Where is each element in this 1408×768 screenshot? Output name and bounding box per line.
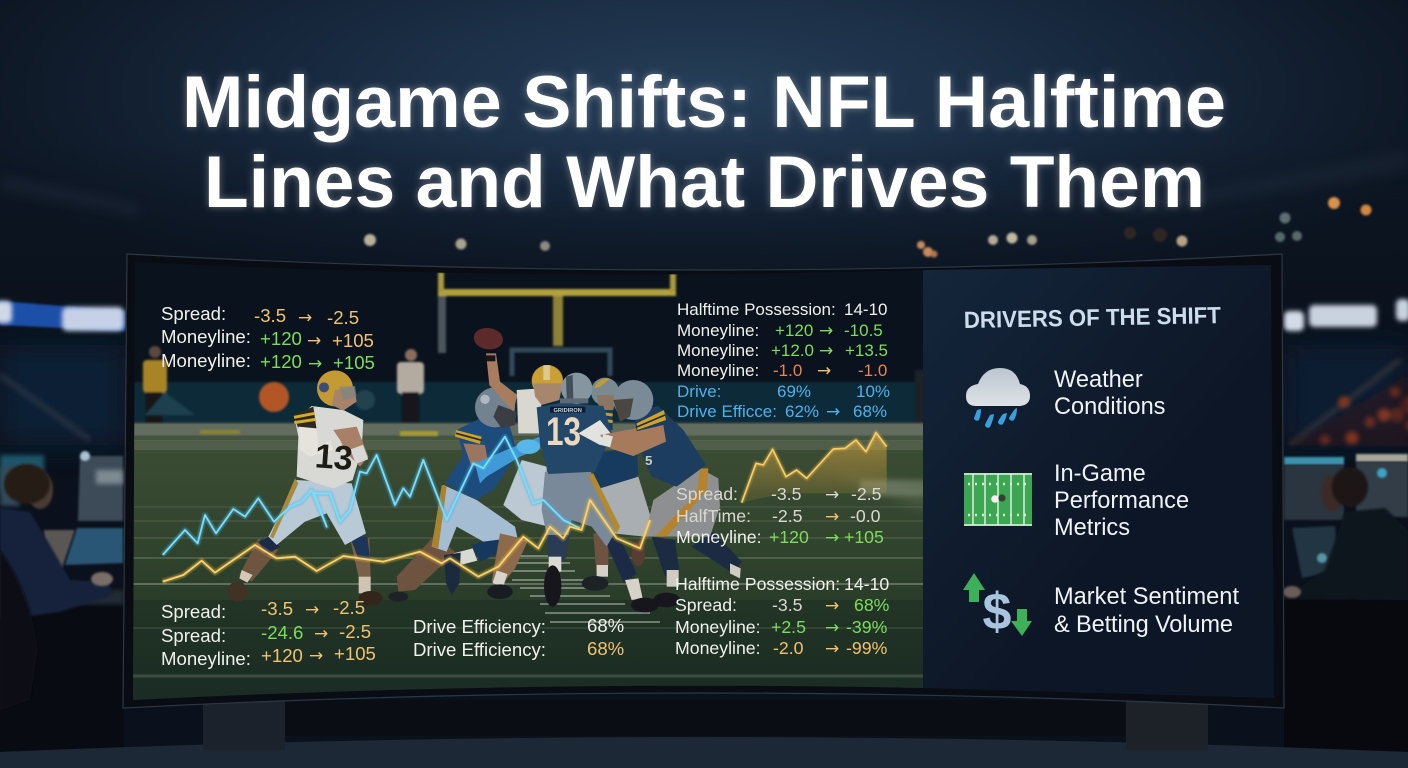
odds block: top right: Moneyline:	[677, 361, 759, 380]
odds block: bottom left: -2.5	[339, 621, 371, 642]
odds block: bottom left: Moneyline:	[161, 648, 251, 669]
odds block: top left: →	[307, 331, 321, 351]
odds block: bottom right: 68%	[854, 595, 890, 615]
odds block: top left: →	[308, 354, 322, 374]
odds block: bottom right: -39%	[846, 617, 888, 637]
label: market sentiment and betting volume: Market Sentiment	[1054, 584, 1239, 610]
odds block: middle right: -0.0	[850, 506, 881, 526]
drive efficiency block: Drive Efficiency:	[413, 639, 546, 660]
icon: rain cloud	[966, 368, 1030, 428]
odds block: middle right: +105	[844, 527, 884, 547]
odds block: top right: -1.0	[773, 361, 802, 380]
label: weather conditions: Conditions	[1054, 394, 1165, 420]
odds block: bottom right: +2.5	[771, 617, 806, 637]
label: weather conditions	[1054, 367, 1165, 420]
odds block: bottom right: -99%	[846, 638, 888, 658]
monitor stands	[203, 700, 1208, 750]
odds block: top right: 68%	[853, 402, 887, 421]
odds block: top left: Moneyline:	[161, 350, 251, 371]
odds block: middle right: →	[825, 507, 839, 527]
odds block: top right: 62%	[785, 402, 819, 421]
stadium light strips	[0, 299, 1408, 331]
odds block: top left	[161, 303, 375, 374]
stadium wall band	[133, 382, 925, 424]
odds block: top right: →	[819, 321, 833, 341]
odds block: bottom left: →	[309, 646, 323, 666]
odds block: bottom left: +120	[261, 645, 303, 666]
players: right lineman: 5	[645, 453, 653, 468]
odds block: top right: Drive:	[677, 382, 721, 401]
label: market sentiment and betting volume	[1054, 584, 1239, 638]
odds block: top left: -3.5	[254, 305, 286, 326]
odds block: top right: -1.0	[858, 361, 887, 380]
drive efficiency block	[413, 615, 624, 660]
line chart: blue trend	[163, 437, 580, 555]
stadium background people	[143, 346, 925, 430]
odds block: middle right	[676, 484, 884, 548]
odds block: bottom left: -2.5	[333, 597, 365, 618]
odds block: middle right: -3.5	[771, 484, 802, 504]
crowd lights right	[1290, 375, 1408, 447]
players: quarterback 13 (left)	[227, 370, 383, 606]
odds block: bottom right: -2.0	[773, 638, 804, 658]
players: center number 13 rusher	[537, 373, 666, 612]
odds block: middle right: HalfTime:	[676, 506, 751, 526]
monitor bezel	[123, 254, 1284, 708]
odds block: top right: Halftime Possession:	[677, 300, 836, 319]
odds block: top right: +12.0	[771, 341, 814, 360]
bokeh stadium lights	[364, 197, 1372, 258]
odds block: middle right: +120	[769, 527, 809, 547]
odds block: top left: +120	[260, 328, 302, 349]
label: in-game performance metrics	[1054, 461, 1189, 541]
odds block: top left: Spread:	[161, 303, 226, 324]
odds block: bottom right: -3.5	[772, 595, 803, 615]
panel: drivers of the shift	[923, 265, 1274, 698]
title: Lines and What Drives Them	[204, 142, 1205, 223]
icon: dollar with up and down arrows: $	[983, 583, 1012, 641]
field	[133, 424, 925, 704]
odds block: bottom left	[161, 597, 376, 669]
odds block: middle right: →	[825, 528, 839, 548]
odds block: bottom left: +105	[334, 643, 376, 664]
screen: football photo	[133, 260, 930, 705]
odds block: top right: -10.5	[844, 321, 883, 340]
odds block: bottom right: 14-10	[844, 574, 889, 594]
odds block: bottom right: Spread:	[675, 595, 737, 615]
odds block: bottom right: Moneyline:	[675, 638, 761, 658]
odds block: top left: -2.5	[327, 307, 359, 328]
odds block: top left: Moneyline:	[161, 326, 251, 347]
odds block: top left: +105	[332, 330, 374, 351]
label: market sentiment and betting volume: & Betting Volume	[1054, 612, 1233, 638]
odds block: bottom right: Moneyline:	[675, 617, 761, 637]
odds block: top right: Drive Efficce:	[677, 402, 777, 421]
odds block: bottom right: →	[825, 618, 839, 638]
label: in-game performance metrics: Performance	[1054, 488, 1189, 514]
label: in-game performance metrics: In-Game	[1054, 461, 1146, 487]
odds block: top right: Moneyline:	[677, 321, 759, 340]
icon: football field	[964, 473, 1032, 526]
odds block: bottom left: -3.5	[261, 598, 293, 619]
panel heading: DRIVERS OF THE SHIFT	[964, 302, 1222, 333]
odds block: middle right: -2.5	[851, 484, 882, 504]
odds block: top right: +13.5	[845, 341, 888, 360]
odds block: top right: →	[819, 341, 833, 361]
title	[182, 62, 1226, 223]
odds block: middle right: -2.5	[772, 506, 803, 526]
odds block: top left: +105	[333, 352, 375, 373]
players: quarterback 13 (left): 13	[314, 437, 354, 478]
players: back right lineman	[582, 378, 652, 591]
area chart: gold rise on right	[742, 433, 887, 503]
label: in-game performance metrics: Metrics	[1054, 515, 1130, 541]
players: blue defender left	[388, 387, 540, 602]
players: center number 13 rusher: 13	[546, 410, 581, 454]
odds block: top right: +120	[775, 321, 813, 340]
odds block: bottom right: Halftime Possession:	[675, 574, 840, 594]
odds block: bottom left: →	[305, 600, 319, 620]
left operator at desk	[0, 451, 124, 768]
odds block: bottom right: →	[825, 596, 839, 616]
players: back quarterback throwing	[472, 326, 563, 599]
icon: dollar with up and down arrows	[963, 573, 1032, 641]
label: weather conditions: Weather	[1054, 367, 1143, 393]
odds block: middle right: Spread:	[676, 484, 738, 504]
right operator at desk	[1283, 454, 1408, 768]
odds block: top left: +120	[260, 351, 302, 372]
odds block: middle right: →	[825, 485, 839, 505]
title: Midgame Shifts: NFL Halftime	[182, 62, 1226, 143]
odds block: top right: 69%	[777, 382, 811, 401]
odds block: bottom left: -24.6	[261, 622, 303, 643]
odds block: top right: Moneyline:	[677, 341, 759, 360]
odds block: top right: 10%	[856, 382, 890, 401]
odds block: bottom right	[675, 574, 890, 659]
odds block: bottom left: Spread:	[161, 625, 226, 646]
players: right lineman	[611, 380, 742, 607]
odds block: top right: 14-10	[844, 300, 887, 319]
line chart: gold trend	[163, 500, 650, 582]
drive efficiency block: 68%	[587, 638, 624, 659]
yard hash marks	[510, 556, 660, 622]
odds block: middle right: Moneyline:	[676, 527, 762, 547]
goalposts	[438, 272, 676, 376]
odds block: top left: →	[298, 308, 312, 328]
odds block: top right: →	[817, 361, 831, 381]
odds block: bottom left: Spread:	[161, 601, 226, 622]
odds block: top right: →	[826, 402, 840, 422]
odds block: bottom left: →	[314, 624, 328, 644]
floor	[0, 737, 1408, 768]
drive efficiency block: 68%	[587, 615, 624, 636]
odds block: top right	[677, 300, 890, 422]
odds block: bottom right: →	[825, 639, 839, 659]
players: center number 13 rusher: GRIDIRON	[554, 408, 582, 414]
drive efficiency block: Drive Efficiency:	[413, 616, 546, 637]
